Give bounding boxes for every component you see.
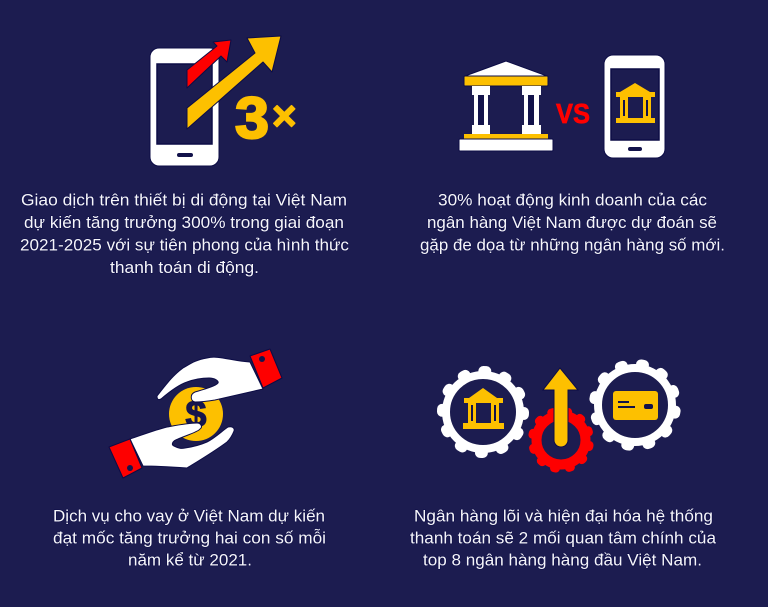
text: lending: đạt mốc tăng trưởng hai con số mỗi	[53, 528, 326, 548]
text: mobile transactions: Giao dịch trên thiết bị di động tại Việt Nam	[21, 192, 347, 210]
text: core banking: Ngân hàng lõi và hiện đại hóa hệ thống	[414, 508, 713, 526]
text: mobile transactions: thanh toán di động.	[110, 259, 259, 277]
icon: phone with growth arrows and 3x	[150, 36, 297, 166]
icon: bank building	[459, 61, 553, 151]
icon: hands exchanging coin	[109, 349, 282, 478]
text: mobile transactions: 2021-2025 với sự tiên phong của hình thức	[20, 236, 349, 254]
text: core banking: thanh toán sẽ 2 mối quan tâm chính của	[410, 530, 717, 548]
icon: white gear with bank	[442, 371, 524, 453]
text: lending	[53, 508, 326, 570]
text: core banking: top 8 ngân hàng hàng đầu Việt Nam.	[423, 552, 702, 570]
icon: red gear with up arrow	[527, 368, 595, 474]
icon: phone with bank	[604, 55, 665, 158]
icon: phone with growth arrows and 3x: 3	[235, 86, 269, 151]
text: lending: năm kể từ 2021.	[128, 552, 252, 570]
panel: mobile transactions growth	[20, 36, 349, 277]
label: VS: VS	[556, 98, 590, 129]
text: digital bank threat: gặp đe dọa từ những ngân hàng số mới.	[420, 236, 725, 254]
panel: core banking modernization	[410, 359, 717, 570]
icon: hands exchanging coin: $	[185, 394, 207, 436]
text: digital bank threat	[420, 192, 725, 254]
text: core banking	[410, 508, 717, 570]
panel: bank vs digital bank	[420, 55, 725, 254]
text: digital bank threat: ngân hàng Việt Nam được dự đoán sẽ	[427, 214, 717, 232]
icon: phone with growth arrows and 3x: ×	[272, 92, 297, 139]
text: mobile transactions	[20, 192, 349, 277]
icon: white gear with card	[589, 359, 681, 451]
text: digital bank threat: 30% hoạt động kinh doanh của các	[438, 192, 707, 210]
panel: lending growth	[53, 349, 326, 570]
text: lending: Dịch vụ cho vay ở Việt Nam dự kiến	[53, 508, 325, 526]
text: mobile transactions: dự kiến tăng trưởng 300% trong giai đoạn	[24, 214, 344, 232]
